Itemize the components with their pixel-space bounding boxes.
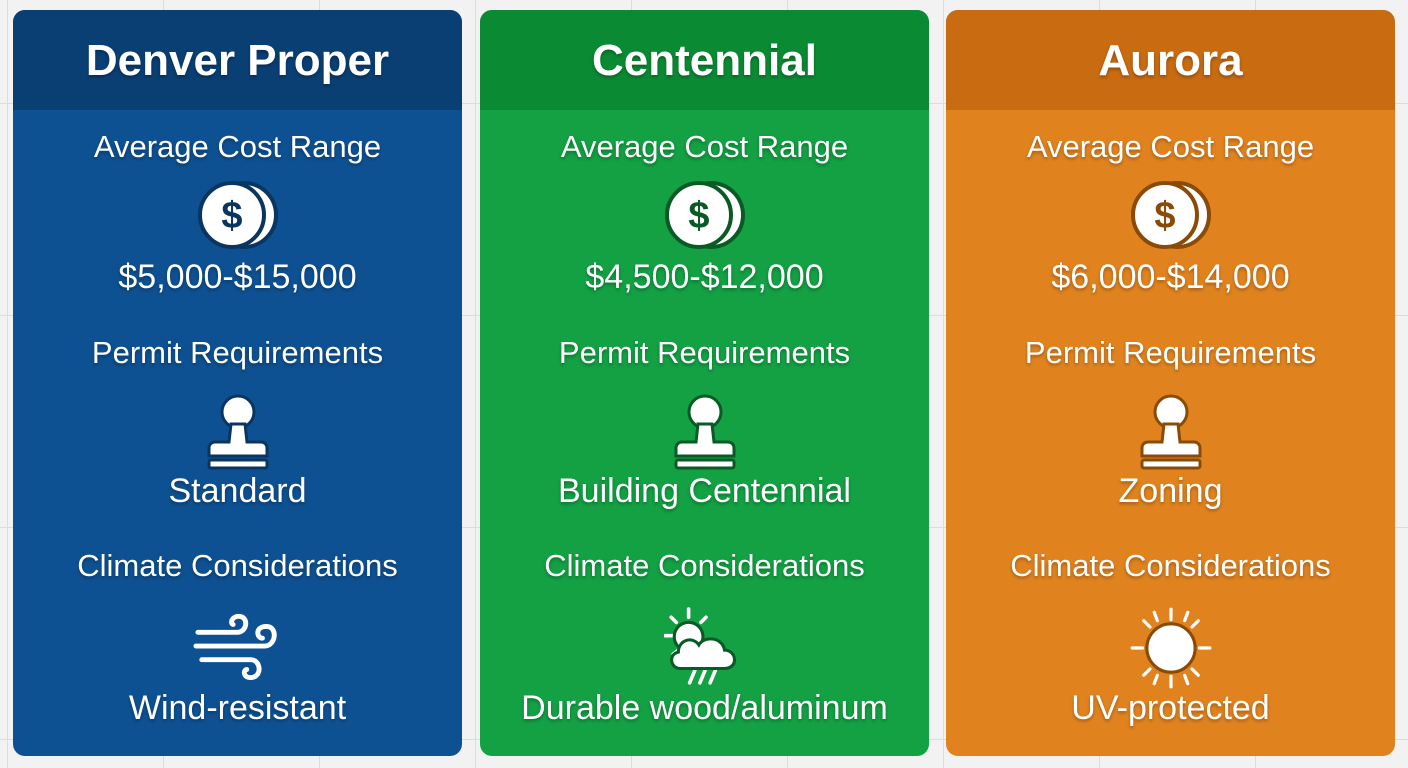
icon: sun cloud rain — [664, 607, 736, 685]
heading: Centennial — [480, 10, 929, 110]
label: permit: Permit Requirements — [1025, 335, 1316, 370]
heading: Aurora — [946, 10, 1395, 110]
icon: coins — [665, 181, 745, 249]
value: cost: $5,000-$15,000 — [118, 258, 357, 296]
icon: wind — [194, 614, 277, 680]
label: climate: Climate Considerations — [77, 548, 398, 583]
label: cost: Average Cost Range — [561, 129, 848, 164]
icon: coins — [198, 181, 278, 249]
panel: Centennial — [480, 10, 929, 756]
value: permit: Standard — [168, 472, 306, 510]
label: cost: Average Cost Range — [94, 129, 381, 164]
icon: stamp — [1140, 394, 1202, 470]
value: climate: Durable wood/aluminum — [521, 689, 888, 727]
icon: sun — [1130, 608, 1212, 688]
label: climate: Climate Considerations — [1010, 548, 1331, 583]
label: permit: Permit Requirements — [92, 335, 383, 370]
icon: stamp — [674, 394, 736, 470]
value: permit: Zoning — [1119, 472, 1222, 510]
heading: Denver Proper — [13, 10, 462, 110]
value: climate: UV-protected — [1071, 689, 1270, 727]
panel: Aurora — [946, 10, 1395, 756]
value: cost: $6,000-$14,000 — [1051, 258, 1290, 296]
icon: coins: $ — [221, 195, 242, 237]
panel: Denver Proper — [13, 10, 462, 756]
value: permit: Building Centennial — [558, 472, 851, 510]
icon: stamp — [208, 394, 268, 470]
heading: Denver Proper: Denver Proper — [86, 36, 389, 85]
icon: coins: $ — [1154, 195, 1175, 237]
heading: Aurora: Aurora — [1098, 36, 1243, 85]
label: climate: Climate Considerations — [544, 548, 865, 583]
value: cost: $4,500-$12,000 — [585, 258, 824, 296]
label: permit: Permit Requirements — [559, 335, 850, 370]
value: climate: Wind-resistant — [129, 689, 346, 727]
label: cost: Average Cost Range — [1027, 129, 1314, 164]
icon: coins: $ — [688, 195, 709, 237]
heading: Centennial: Centennial — [592, 36, 817, 85]
icon: coins — [1131, 181, 1211, 249]
